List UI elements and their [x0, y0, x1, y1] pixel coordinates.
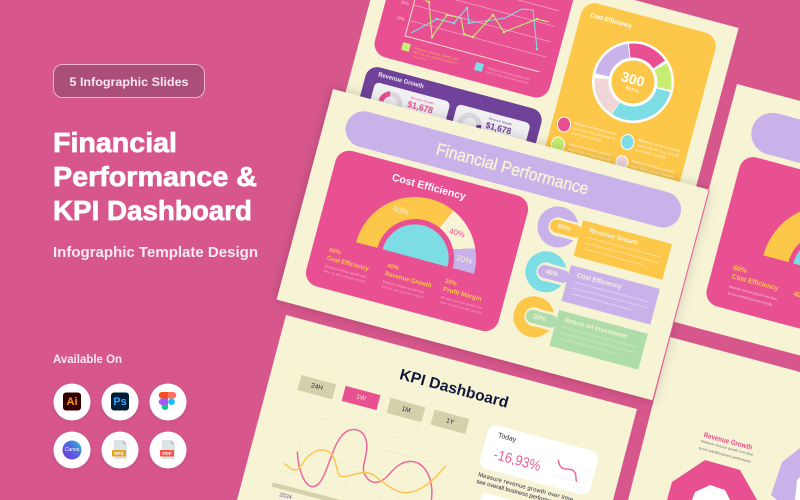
legend: cost efficiency: Measure revenue growth over: [324, 264, 368, 279]
edge line: [653, 190, 709, 400]
legend: cost efficiency: Cost Efficiency: [326, 255, 370, 273]
title pill: [747, 108, 800, 198]
card: today: [478, 423, 600, 496]
card: today: -16,93%: [492, 447, 542, 475]
badge: 5 Infographic Slides: [54, 64, 204, 98]
slide: KPI dashboard: [237, 315, 637, 500]
legend text: [727, 265, 800, 307]
panel: revenue growth: Revenue Growth: [377, 71, 425, 90]
icons: software formats: [54, 384, 186, 468]
chart legend: Measure revenue growth over: [414, 46, 460, 62]
badge: 5 Infographic Slides: 5 Infographic Slides: [70, 75, 189, 89]
legend: cost efficiency: time to see overall results: [323, 269, 366, 284]
chart legend: results: [412, 54, 427, 62]
chart legend: Measure revenue growth over: [487, 66, 531, 82]
time range buttons: 1W: [355, 393, 368, 403]
legend: profit margin: Profit Margin: [442, 286, 482, 303]
item: cost efficiency 40%: Cost Efficiency: [576, 272, 623, 291]
item: cost efficiency 40%: 40%: [545, 268, 559, 279]
legend text: Cost Efficiency: [731, 273, 779, 293]
icon: PDF file: PDF: [162, 451, 172, 456]
legend text: 60%: [732, 265, 748, 275]
heading: KPI Dashboard: KPI Dashboard: [398, 366, 510, 412]
item: return on investment 20%: 20%: [533, 313, 547, 323]
legend: profit margin: [439, 279, 488, 315]
chart legend: time to see overall business: [486, 70, 530, 85]
semicircle chart: 40%: [448, 227, 466, 239]
item: cost efficiency 40%: [525, 253, 660, 325]
panel: cost efficiency donut: over time to see overall: [637, 143, 679, 158]
panel: cost efficiency donut: over time to see overall: [568, 147, 610, 162]
card: revenue 2: Revenue Growth: [488, 116, 513, 127]
panel: cost efficiency donut: Measure revenue growth: [632, 159, 674, 174]
time range buttons: 1M: [401, 405, 411, 415]
chart legend: [401, 42, 531, 85]
text block: [698, 439, 754, 464]
legend: revenue growth: time to see overall results: [381, 284, 424, 299]
item: return on investment 20%: [513, 298, 648, 370]
legend: profit margin: Measure revenue growth over: [440, 295, 484, 310]
card: revenue 1: Revenue Growth: [410, 95, 434, 106]
panel: cost efficiency: Cost Efficiency: [391, 172, 467, 203]
time range buttons: 24H: [310, 382, 324, 392]
panel: cost efficiency: [303, 148, 531, 334]
available on label: Available On: [53, 354, 122, 366]
semicircle chart: 60%: [392, 204, 410, 217]
semicircle chart: [356, 183, 490, 274]
legend text: to see overall business results: [727, 291, 773, 307]
semi-donut chart: [763, 190, 800, 273]
panel: cost efficiency donut: Items: [625, 85, 640, 95]
chart legend: time to see overall business: [413, 50, 458, 66]
main title: [53, 127, 257, 226]
card: revenue 1: $1,678: [406, 99, 434, 115]
panel: cost efficiency: [703, 154, 800, 347]
legend: cost efficiency: [323, 248, 372, 284]
main title: Performance &: [53, 161, 257, 192]
slide: financial performance: [277, 89, 709, 400]
chart lines: [411, 0, 549, 50]
panel: cost efficiency donut: Measure revenue growth: [569, 142, 611, 157]
panel: cost efficiency donut: Measure revenue growth: [638, 138, 680, 153]
panel: cost efficiency donut: over time to see overall: [631, 164, 673, 179]
donut legend: [552, 117, 634, 168]
item: revenue growth 60%: 60%: [557, 223, 571, 233]
legend: profit margin: 20%: [444, 279, 458, 288]
time range buttons: 1Y: [445, 417, 455, 426]
legend: profit margin: time to see overall results: [439, 300, 482, 315]
semicircle chart: 20%: [455, 253, 473, 266]
icon: Canva: Canva: [65, 447, 79, 453]
card: revenue 2: [446, 104, 531, 166]
main title: Financial: [53, 127, 177, 158]
slide: back top slide: [316, 0, 739, 298]
item: return on investment 20%: Return on Investment: [564, 317, 629, 341]
legend text: Measure revenue growth over time: [728, 285, 778, 301]
legend: revenue growth: Revenue Growth: [384, 270, 432, 290]
chart: purple octagon: [771, 448, 800, 500]
title pill: Financial Performance: [434, 140, 591, 199]
legend: revenue growth: [381, 263, 434, 301]
donut chart: [589, 38, 677, 126]
card: revenue 1: [364, 82, 451, 144]
panel: revenue growth: [343, 64, 544, 208]
icon: Figma: [150, 384, 186, 420]
slide: right slide: [673, 84, 800, 363]
main title: KPI Dashboard: [53, 195, 252, 226]
text block: Measure revenue growth over time: [700, 439, 754, 457]
card: today: Today: [497, 432, 517, 444]
slide: lower right slide: [628, 337, 800, 500]
legend: cost efficiency: 60%: [328, 248, 342, 257]
icon: Photoshop: Ps: [113, 396, 127, 408]
panel: cost efficiency donut: Measure revenue growth: [574, 121, 616, 136]
item: revenue growth 60%: [537, 209, 672, 280]
mini sparkline: [552, 460, 590, 484]
heading: revenue growth: Revenue Growth: [703, 430, 754, 452]
panel: line chart: [371, 0, 580, 101]
chart: pink octagon: [667, 460, 757, 500]
icon: EPS file: EPS: [114, 451, 124, 456]
panel: cost efficiency donut: Cost Efficiency: [589, 12, 633, 30]
time range buttons: [297, 374, 469, 435]
line chart: [272, 411, 467, 500]
icon: Illustrator: Ai: [66, 396, 78, 408]
legend: revenue growth: 40%: [386, 263, 400, 272]
legend: revenue growth: Measure revenue growth over: [382, 280, 426, 295]
title pill: [342, 107, 685, 232]
panel: cost efficiency donut: [528, 0, 719, 249]
panel: cost efficiency donut: 300: [620, 68, 647, 90]
panel: cost efficiency donut: business results: [636, 148, 666, 160]
card: revenue 2: $1,678: [485, 120, 512, 136]
subtitle: Infographic Template Design: [53, 244, 258, 261]
panel: line chart: 10%: [396, 15, 406, 22]
item: revenue growth 60%: Revenue Growth: [588, 227, 639, 247]
panel: cost efficiency donut: business results: [572, 131, 602, 143]
panel: cost efficiency donut: over time to see overall: [573, 126, 615, 141]
text block: to see overall business performance: [698, 446, 752, 464]
card: second stat: [480, 492, 512, 500]
